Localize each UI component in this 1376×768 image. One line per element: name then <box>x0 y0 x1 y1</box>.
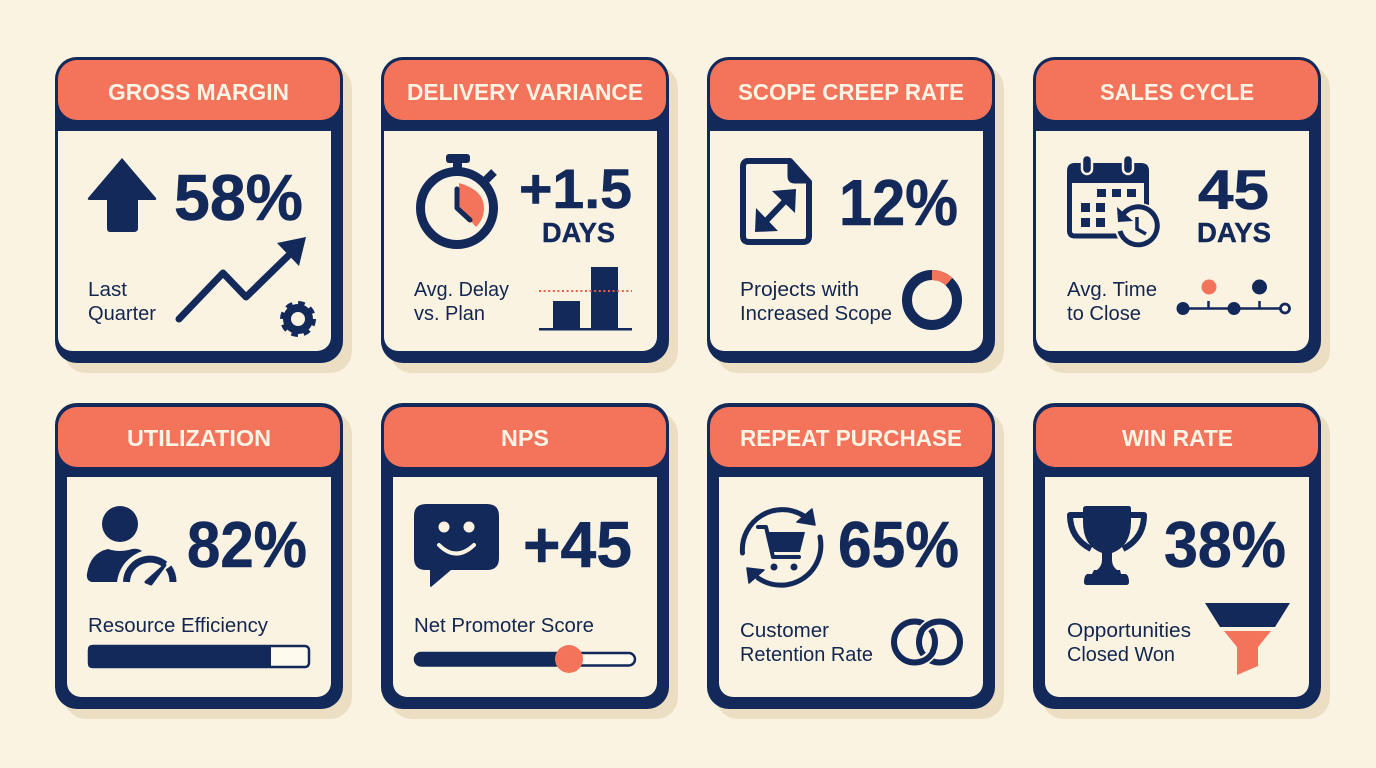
header: nps: NPS <box>501 425 549 451</box>
header: win rate <box>1036 407 1318 467</box>
chart: progress bar <box>88 645 309 668</box>
value: 12%: 12% <box>839 166 958 239</box>
label: avg delay: vs. Plan <box>414 303 485 325</box>
value: +45: +45 <box>523 508 632 581</box>
label: avg delay <box>414 279 509 325</box>
icon: up arrow <box>88 158 156 232</box>
icon: stopwatch <box>420 154 494 244</box>
label: avg delay: Avg. Delay <box>414 279 509 301</box>
label: last quarter <box>88 279 156 325</box>
value: +1.5 days: +1.5 <box>519 157 632 220</box>
label: avg time to close: Avg. Time <box>1067 279 1157 301</box>
label: last quarter: Quarter <box>88 303 156 325</box>
value: 45 days <box>1197 158 1271 248</box>
header: scope creep rate <box>710 60 992 120</box>
label: avg time to close <box>1067 279 1157 325</box>
label: net promoter score: Net Promoter Score <box>414 615 594 637</box>
icon: cart with circular arrows <box>742 509 821 585</box>
panel: utilization <box>55 403 352 719</box>
value: 82%: 82% <box>187 508 307 581</box>
header: sales cycle <box>1036 60 1318 120</box>
panel: win rate <box>1033 403 1330 719</box>
header: scope creep rate: SCOPE CREEP RATE <box>738 79 964 105</box>
label: projects with increased scope: Increased Scope <box>740 303 892 325</box>
icon: document with resize arrow <box>743 161 809 242</box>
panel: sales cycle <box>1033 57 1330 373</box>
icon: trend arrow <box>179 237 306 319</box>
header: gross margin <box>58 60 340 120</box>
label: opportunities closed won <box>1067 620 1191 666</box>
value: 38%: 38% <box>1164 508 1286 581</box>
header: nps <box>384 407 666 467</box>
label: projects with increased scope: Projects with <box>740 279 859 301</box>
header: repeat purchase: REPEAT PURCHASE <box>740 425 962 451</box>
label: customer retention rate: Retention Rate <box>740 644 873 666</box>
header: delivery variance: DELIVERY VARIANCE <box>407 79 643 105</box>
chart: timeline <box>1176 280 1290 315</box>
icon: gear <box>282 304 314 334</box>
panel: scope creep rate <box>707 57 1004 373</box>
panel: delivery variance <box>381 57 678 373</box>
label: avg time to close: to Close <box>1067 303 1141 325</box>
value: 45 days: 45 <box>1198 158 1269 221</box>
icon: trophy <box>1070 506 1144 585</box>
header: gross margin: GROSS MARGIN <box>108 79 289 105</box>
label: customer retention rate: Customer <box>740 620 829 642</box>
panel: repeat purchase <box>707 403 1004 719</box>
icon: calendar with clock <box>1067 155 1163 251</box>
panel: gross margin <box>55 57 352 373</box>
chart: score slider <box>414 645 635 673</box>
header: win rate: WIN RATE <box>1122 425 1233 451</box>
value: +1.5 days: DAYS <box>542 217 615 248</box>
label: projects with increased scope <box>740 279 892 325</box>
value: 58%: 58% <box>174 161 303 234</box>
value: 65%: 65% <box>838 508 959 581</box>
chart: delay bars <box>539 267 632 330</box>
header: repeat purchase <box>710 407 992 467</box>
value: 45 days: DAYS <box>1197 217 1271 248</box>
icon: smiling chat bubble <box>414 504 499 587</box>
header: delivery variance <box>384 60 666 120</box>
header: sales cycle: SALES CYCLE <box>1100 79 1254 105</box>
value: +1.5 days <box>519 157 632 248</box>
label: last quarter: Last <box>88 279 127 301</box>
header: utilization <box>58 407 340 467</box>
label: resource efficiency: Resource Efficiency <box>88 615 268 637</box>
icon: funnel <box>1205 603 1290 675</box>
icon: linked rings <box>894 622 960 662</box>
chart: donut <box>907 275 957 325</box>
label: opportunities closed won: Opportunities <box>1067 620 1191 642</box>
label: opportunities closed won: Closed Won <box>1067 644 1175 666</box>
header: utilization: UTILIZATION <box>127 425 271 451</box>
icon: person with gauge <box>87 506 173 584</box>
label: customer retention rate <box>740 620 873 666</box>
panel: nps <box>381 403 678 719</box>
